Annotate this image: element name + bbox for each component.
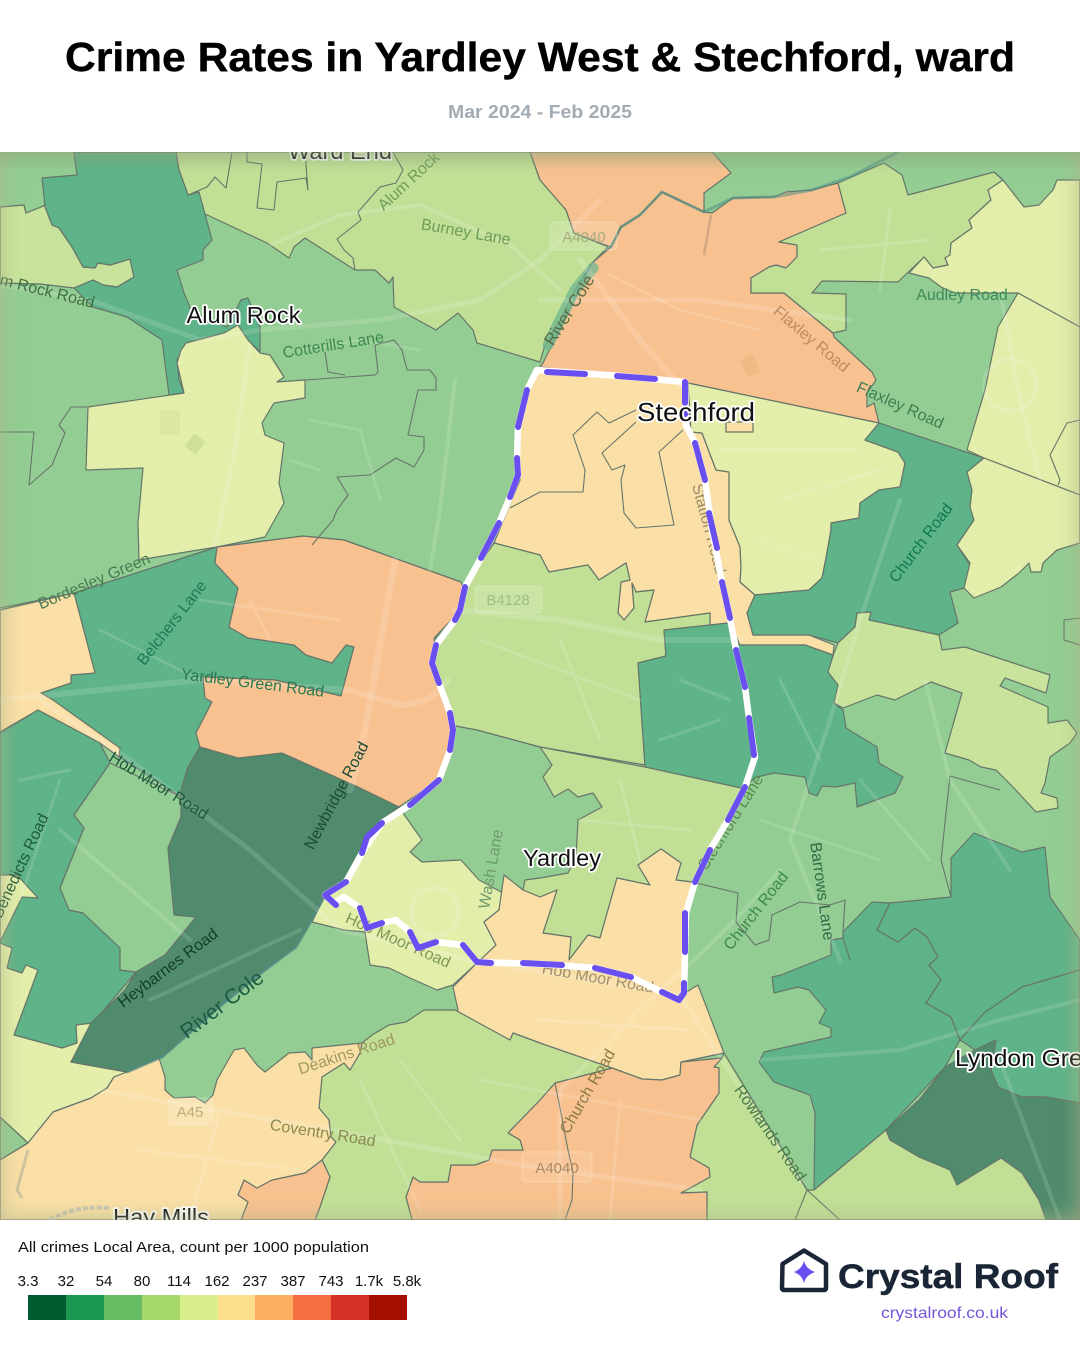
Place names: Stechford — [637, 397, 755, 427]
Road labels: River Cole — [176, 966, 268, 1043]
legend scale values: 237 — [242, 1273, 268, 1290]
legend scale values: 32 — [58, 1273, 74, 1290]
Road labels: Flaxley Road — [854, 379, 946, 433]
Road shields: A4040 — [535, 1160, 579, 1177]
Road labels: Newbridge Road — [302, 739, 373, 852]
subtitle: date range: Mar 2024 - Feb 2025 — [448, 102, 632, 122]
Road shields: B4128 — [486, 592, 530, 609]
Place names: Alum Rock — [186, 302, 301, 328]
Road labels — [0, 148, 1008, 1185]
legend scale values: 54 — [96, 1273, 112, 1290]
Road labels: Church Road — [886, 501, 957, 586]
Road shields: A45 — [177, 1104, 203, 1121]
legend scale values: 5.8k — [393, 1273, 422, 1290]
legend scale values: 387 — [280, 1273, 306, 1290]
Road shields: A4040 — [562, 229, 606, 246]
website: crystalroof.co.uk — [881, 1305, 1009, 1322]
Road labels: Cotterills Lane — [281, 329, 385, 362]
Road labels: Coventry Road — [269, 1117, 377, 1150]
legend scale values: 162 — [204, 1273, 230, 1290]
Place names: Ward End — [288, 138, 392, 164]
legend colour bar — [28, 1295, 407, 1320]
Inner area boundaries — [0, 152, 1080, 1220]
Road labels: Church Road — [557, 1047, 619, 1137]
legend scale values: 80 — [134, 1273, 150, 1290]
Road labels: Heybarnes Road — [115, 925, 221, 1011]
Road labels: Barrows Lane — [806, 841, 837, 942]
Road labels: Bordesley Green — [36, 551, 153, 613]
Crystal Roof logo — [782, 1250, 1059, 1322]
Road labels: Burney Lane — [420, 216, 512, 249]
Place names: Yardley — [523, 845, 602, 871]
Road labels: Deakins Road — [296, 1031, 397, 1078]
Road labels: River Cole — [540, 271, 598, 349]
Neighbourhood areas — [0, 205, 134, 288]
legend scale values: 743 — [318, 1273, 344, 1290]
legend scale values — [18, 1273, 422, 1290]
Road labels: Rowlands Road — [730, 1082, 809, 1185]
Place names — [113, 138, 1080, 1230]
Road labels: Hob Moor Road — [343, 910, 453, 972]
Road labels: Stechford Lane — [695, 772, 767, 873]
River Cole — [127, 152, 898, 1072]
Map details: buildings and railway — [17, 215, 760, 1220]
Road labels: Yardley Green Road — [180, 666, 325, 701]
Road labels: Church Road — [721, 869, 792, 954]
Road labels: Belchers Lane — [134, 578, 211, 669]
Road labels: Hob Moor Road — [106, 749, 211, 823]
Road labels: Audley Road — [916, 287, 1008, 304]
Road shields — [168, 222, 617, 1182]
legend scale values: 3.3 — [18, 1273, 38, 1290]
Road network — [0, 200, 1080, 1220]
legend — [18, 1239, 422, 1320]
legend scale values: 1.7k — [355, 1273, 384, 1290]
Road labels: Alum Rock — [375, 148, 444, 214]
legend scale values: 114 — [167, 1273, 191, 1290]
wordmark: Crystal Roof — [838, 1258, 1059, 1296]
Road labels: Flaxley Road — [770, 303, 852, 376]
Ward boundary: Yardley West & Stechford — [325, 370, 755, 1000]
title: Crime Rates in Yardley West & Stechford, ward — [65, 34, 1015, 80]
legend title: All crimes Local Area, count per 1000 population — [18, 1239, 369, 1256]
Road labels: Hob Moor Road — [541, 960, 655, 997]
Road labels: Wash Lane — [476, 828, 507, 910]
icon: house with star — [782, 1250, 826, 1290]
Place names: Hay Mills — [113, 1204, 209, 1230]
Road labels: Station Road — [688, 482, 729, 576]
